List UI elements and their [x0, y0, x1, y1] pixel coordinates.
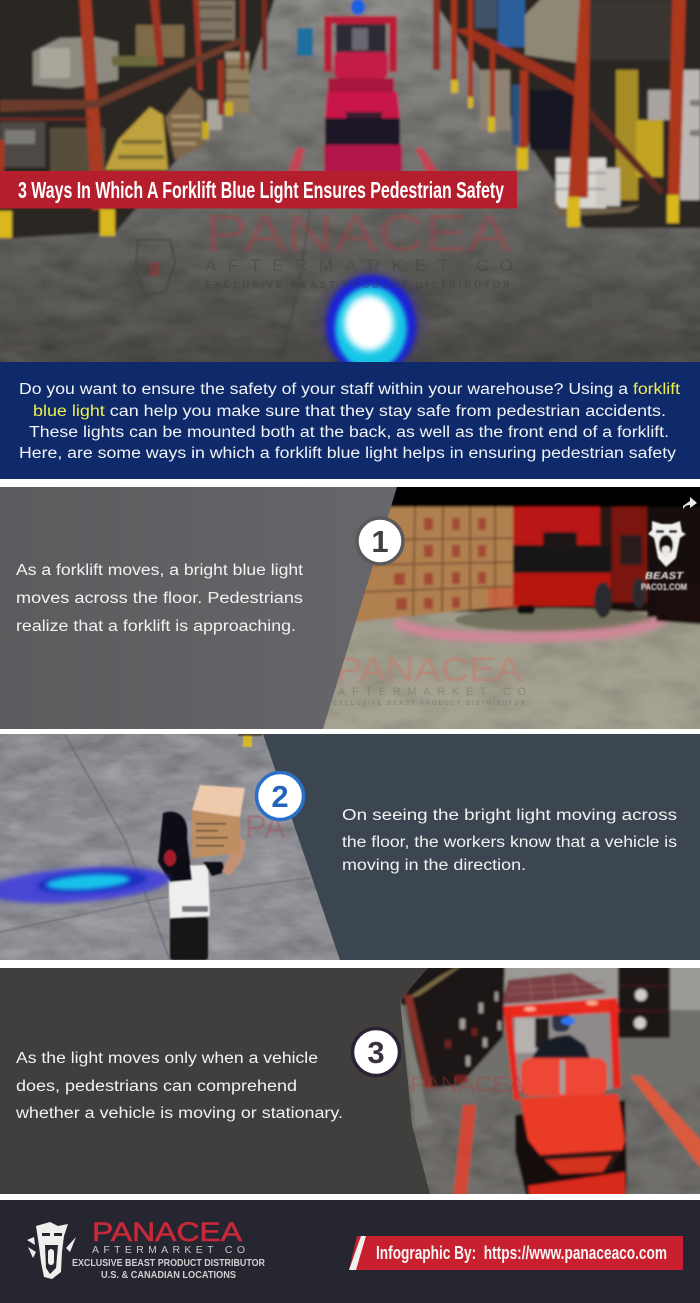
panel 2 text block [263, 734, 700, 960]
right racks [455, 28, 580, 98]
panel 2 photo: worker carrying box [0, 734, 340, 960]
panel 1 text: realize that a forklift is approaching. [16, 618, 296, 635]
brand subtitle: AFTERMARKET CO [92, 1244, 245, 1256]
number badge 2: 2 [271, 779, 289, 814]
intro text: Do you want to ensure the safety of your staff within your warehouse? Using a forklift [19, 381, 681, 398]
pink floor arc [395, 618, 662, 638]
left yellow feet [100, 209, 115, 236]
beast logo with text: BEAST [645, 570, 685, 582]
panel 1 text: As a forklift moves, a bright blue light [16, 562, 304, 579]
number badge 3: 3 [367, 1035, 385, 1070]
shelf with black boxes [400, 960, 505, 1088]
credit bar [349, 1236, 683, 1270]
panel 1 text [16, 562, 304, 635]
blue barrel [297, 28, 313, 56]
hero photo: warehouse aisle with forklift [0, 0, 700, 380]
intro text: blue light can help you make sure that they stay safe from pedestrian accidents. [33, 403, 666, 420]
title text: 3 Ways In Which A Forklift Blue Light Ensures Pedestrian Safety [18, 177, 504, 203]
panel 3 text: does, pedestrians can comprehend [16, 1078, 297, 1095]
intro panel [0, 362, 700, 479]
watermark text: PANACEA [205, 205, 511, 263]
floor cracks [65, 735, 170, 960]
number badge 3 [352, 1028, 400, 1076]
number badge 1: 1 [371, 524, 389, 559]
distributor text: EXCLUSIVE BEAST PRODUCT DISTRIBUTOR [72, 1258, 266, 1269]
title banner [0, 171, 517, 208]
left goods lower [0, 122, 45, 167]
panel 2 text: On seeing the bright light moving across [342, 807, 677, 824]
right goods [525, 0, 580, 63]
cab interior [514, 1012, 612, 1090]
watermark [136, 214, 512, 294]
panel 3 text: As the light moves only when a vehicle [16, 1050, 318, 1067]
watermark: PA [245, 809, 286, 845]
watermark: AFTERMARKET CO [205, 256, 513, 275]
stacked boxes [352, 507, 520, 622]
red forklift [513, 507, 611, 547]
floor shadow [455, 608, 655, 632]
forklift [324, 16, 397, 72]
forklift wheels and chassis [515, 1100, 627, 1200]
beacon [351, 0, 365, 15]
panel 3 text: whether a vehicle is moving or stationary. [15, 1105, 343, 1122]
panel 2 text: moving in the direction. [342, 857, 526, 874]
brand name: PANACEA [92, 1217, 242, 1247]
propane tank [521, 1058, 607, 1096]
yellow post [243, 734, 252, 747]
watermark gorilla [136, 240, 175, 295]
intro text: Here, are some ways in which a forklift blue light helps in ensuring pedestrian safety [19, 445, 676, 462]
number badge 1 [357, 518, 403, 564]
watermark: EXCLUSIVE BEAST PRODUCT DISTRIBUTOR [205, 280, 511, 291]
share arrow [683, 497, 697, 509]
intro text: These lights can be mounted both at the back, as well as the front end of a forklift. [29, 424, 669, 441]
left goods upper [33, 37, 118, 88]
panel 1 photo: forklift and boxes [323, 487, 700, 729]
hood [520, 1094, 625, 1155]
panel 3 text [15, 1050, 343, 1122]
watermark: EXCLUSIVE BEAST PRODUCT DISTRIBUTOR [333, 701, 526, 707]
blue lights [561, 1017, 575, 1025]
blue light oval [0, 862, 171, 908]
locations text: U.S. & CANADIAN LOCATIONS [101, 1270, 236, 1281]
left racks [78, 0, 106, 210]
mast frame [504, 998, 620, 1018]
worker [170, 917, 208, 960]
floor crack [292, 211, 311, 314]
icon: gorilla logo [27, 1222, 76, 1279]
beast logo with text [641, 521, 687, 592]
right yellow feet [567, 197, 580, 227]
number badge 2 [256, 772, 304, 820]
black boxes right [618, 960, 670, 1038]
panel 3 text block [0, 968, 430, 1194]
panel 1 text block [0, 487, 397, 729]
panel 2 text: the floor, the workers know that a vehicle is [342, 834, 677, 851]
watermark: PANACEA [410, 1072, 525, 1097]
blue light spot [322, 272, 422, 375]
watermark [334, 657, 526, 705]
warehouse scene [0, 0, 700, 380]
panel 3 photo: forklift from above [400, 968, 700, 1194]
red floor lines [288, 148, 305, 172]
dark box on right [654, 614, 700, 626]
cardboard box [192, 785, 245, 817]
panel 1 text: moves across the floor. Pedestrians [16, 590, 303, 607]
panel 2 text [342, 807, 677, 874]
watermark: PANACEA [336, 651, 522, 689]
intro text [19, 381, 681, 462]
beast logo with text: PACO1.COM [641, 582, 687, 592]
red floor lines [453, 1105, 476, 1200]
watermark: AFTERMARKET CO [338, 686, 526, 698]
footer [0, 1200, 700, 1303]
roof grate [503, 973, 607, 1006]
